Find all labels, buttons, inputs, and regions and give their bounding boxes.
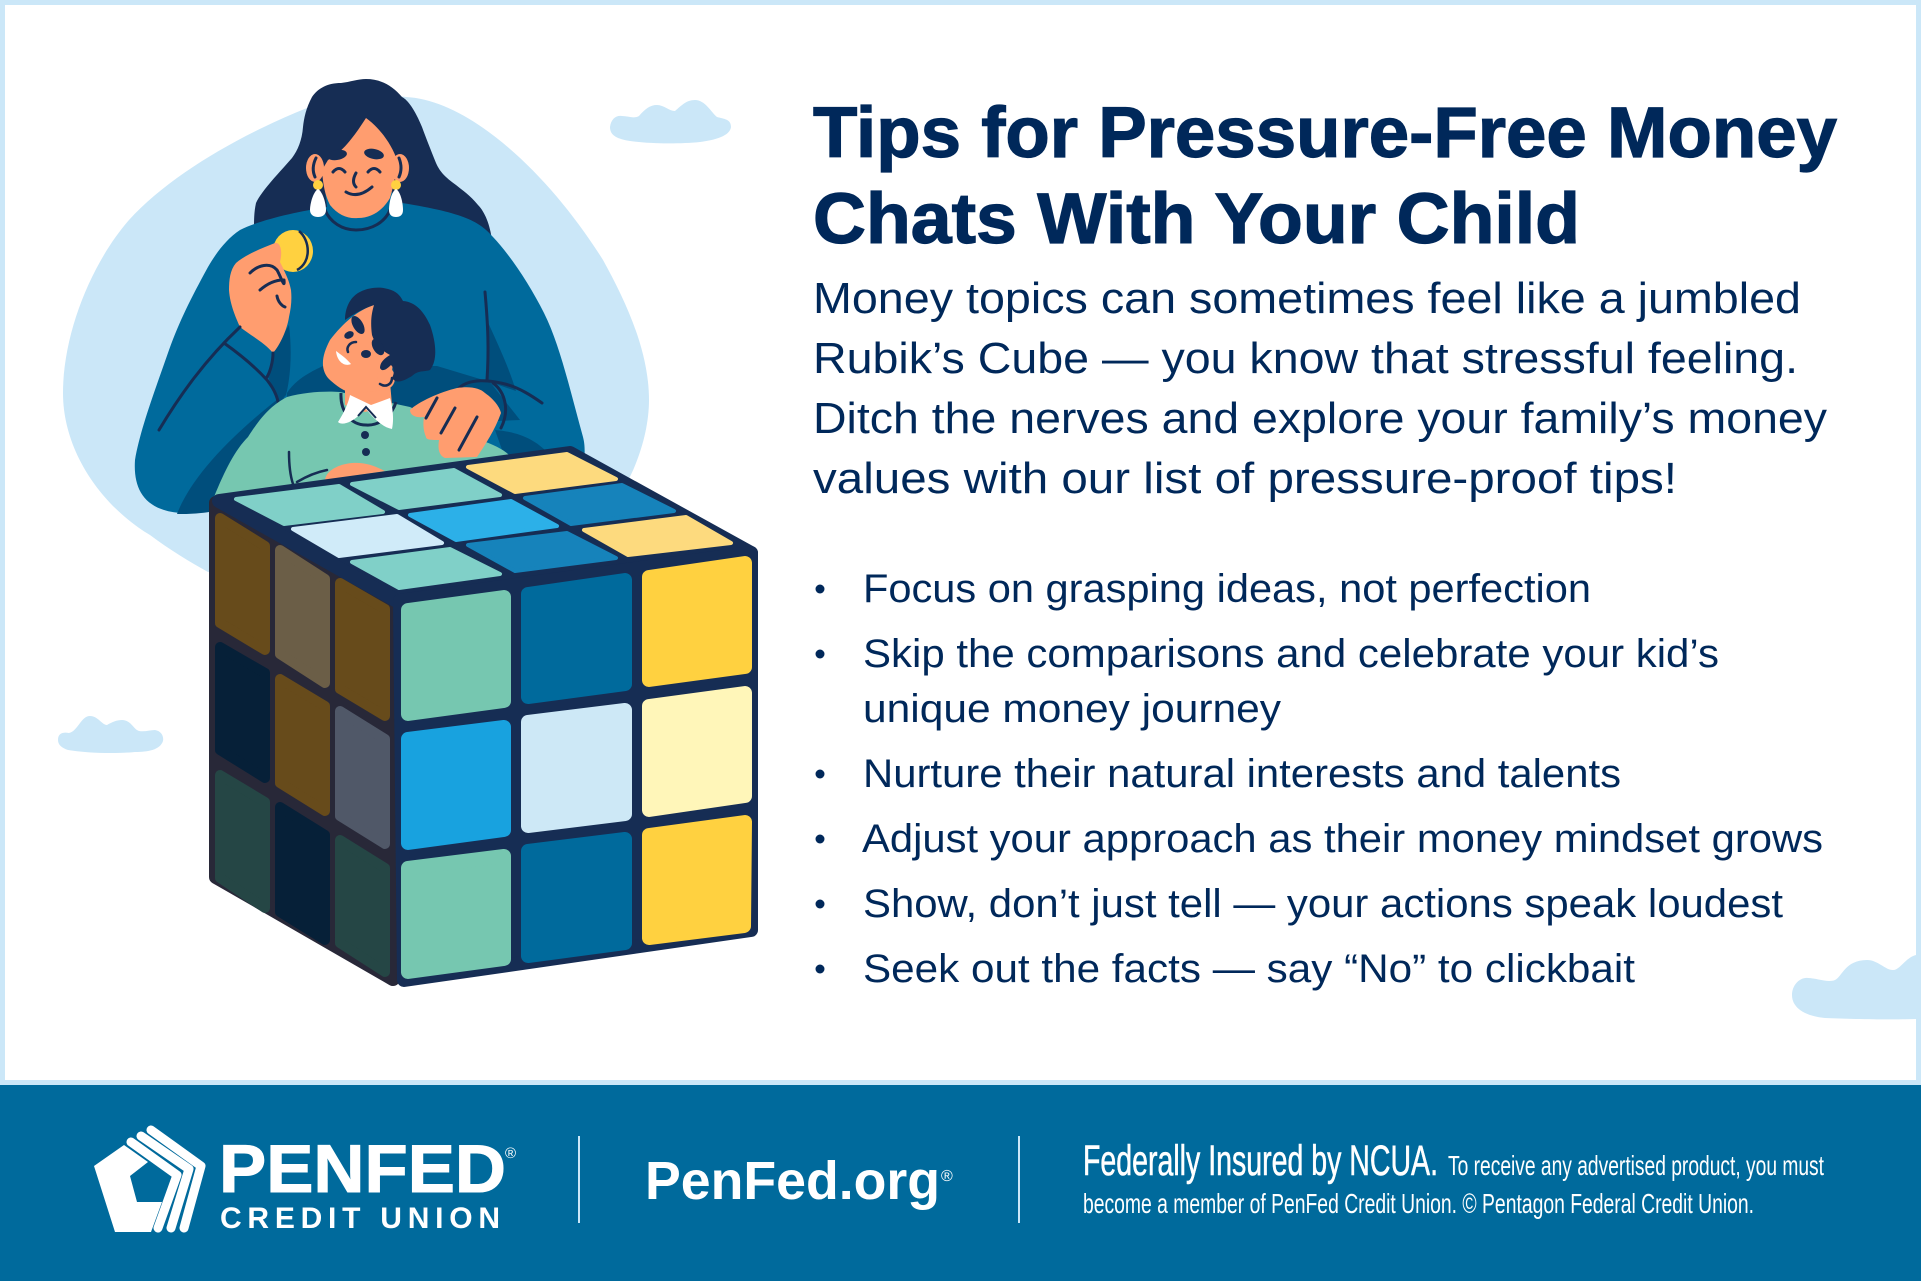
- child facial features: [336, 314, 392, 386]
- disclaimer: Federally Insured by NCUA.: [1083, 1137, 1438, 1185]
- tip items: Focus on grasping ideas, not perfection: [863, 567, 1591, 611]
- logo: wordmark: CREDIT UNION: [220, 1202, 500, 1235]
- child buttons: [361, 431, 370, 456]
- tip items: Adjust your approach as their money mindset grows: [862, 817, 1823, 861]
- tips list: [816, 567, 1823, 991]
- footer band: [0, 1085, 1921, 1281]
- website: PenFed.org: [645, 1151, 940, 1211]
- child sweater: [214, 392, 512, 505]
- child ear: [377, 367, 395, 389]
- intro paragraph: Ditch the nerves and explore your family’s money: [813, 395, 1827, 443]
- cloud: right: [1792, 955, 1916, 1019]
- child hair: [345, 288, 435, 382]
- logo: wordmark: [219, 1131, 516, 1235]
- illustration: mother and child with cube: [63, 79, 751, 980]
- website: ®: [941, 1168, 953, 1185]
- left stickers: [220, 518, 385, 972]
- rubik's cube: [216, 453, 751, 980]
- intro paragraph: [813, 275, 1827, 503]
- intro paragraph: Rubik’s Cube — you know that stressful feeling.: [813, 335, 1798, 383]
- tip items: [862, 567, 1823, 991]
- child sleeve lines: [289, 452, 327, 484]
- bullet markers: [816, 584, 824, 974]
- child collar: [338, 395, 393, 429]
- sweater collar line: [325, 210, 390, 230]
- child hand: [325, 463, 385, 480]
- top stickers: [236, 454, 731, 588]
- mother face: [322, 118, 397, 218]
- child neckline: [341, 393, 396, 425]
- cloud: top: [610, 100, 731, 143]
- mother hand holding coin: [229, 243, 291, 353]
- finger lines: [426, 398, 477, 450]
- mother ears: [306, 154, 409, 182]
- sweater shadows: [177, 320, 547, 514]
- divider two: [1018, 1136, 1020, 1223]
- tip items: Seek out the facts — say “No” to clickbait: [863, 947, 1635, 991]
- title: Tips for Pressure-Free Money: [813, 94, 1838, 173]
- disclaimer: [1083, 1137, 1824, 1219]
- background blob: [63, 95, 649, 572]
- cube top face: [219, 453, 751, 601]
- mother sweater: [135, 190, 585, 513]
- tip items: unique money journey: [863, 687, 1281, 731]
- mother hair: [254, 79, 492, 240]
- logo: wordmark: ®: [505, 1145, 516, 1162]
- tip items: Skip the comparisons and celebrate your kid’s: [863, 632, 1719, 676]
- cube left face: [216, 503, 393, 979]
- title: [813, 94, 1838, 259]
- tip items: Nurture their natural interests and talents: [863, 752, 1621, 796]
- mother hand on child's shoulder: [410, 387, 501, 458]
- coin: [273, 230, 313, 272]
- tip items: Show, don’t just tell — your actions speak loudest: [863, 882, 1783, 926]
- logo: pentagon icon: [94, 1130, 201, 1232]
- front stickers: [408, 563, 745, 972]
- hand and sleeve lines: [159, 265, 542, 430]
- child neck: [345, 382, 392, 412]
- cloud: left: [58, 716, 163, 753]
- title: Chats With Your Child: [813, 180, 1580, 259]
- mother earrings: [310, 180, 403, 217]
- divider one: [578, 1136, 580, 1223]
- child head: [323, 305, 395, 393]
- intro paragraph: Money topics can sometimes feel like a jumbled: [813, 275, 1801, 323]
- cube front face: [400, 553, 751, 980]
- logo: wordmark: PENFED: [219, 1131, 506, 1207]
- intro paragraph: values with our list of pressure-proof tips!: [813, 455, 1677, 503]
- mother facial features: [313, 147, 401, 195]
